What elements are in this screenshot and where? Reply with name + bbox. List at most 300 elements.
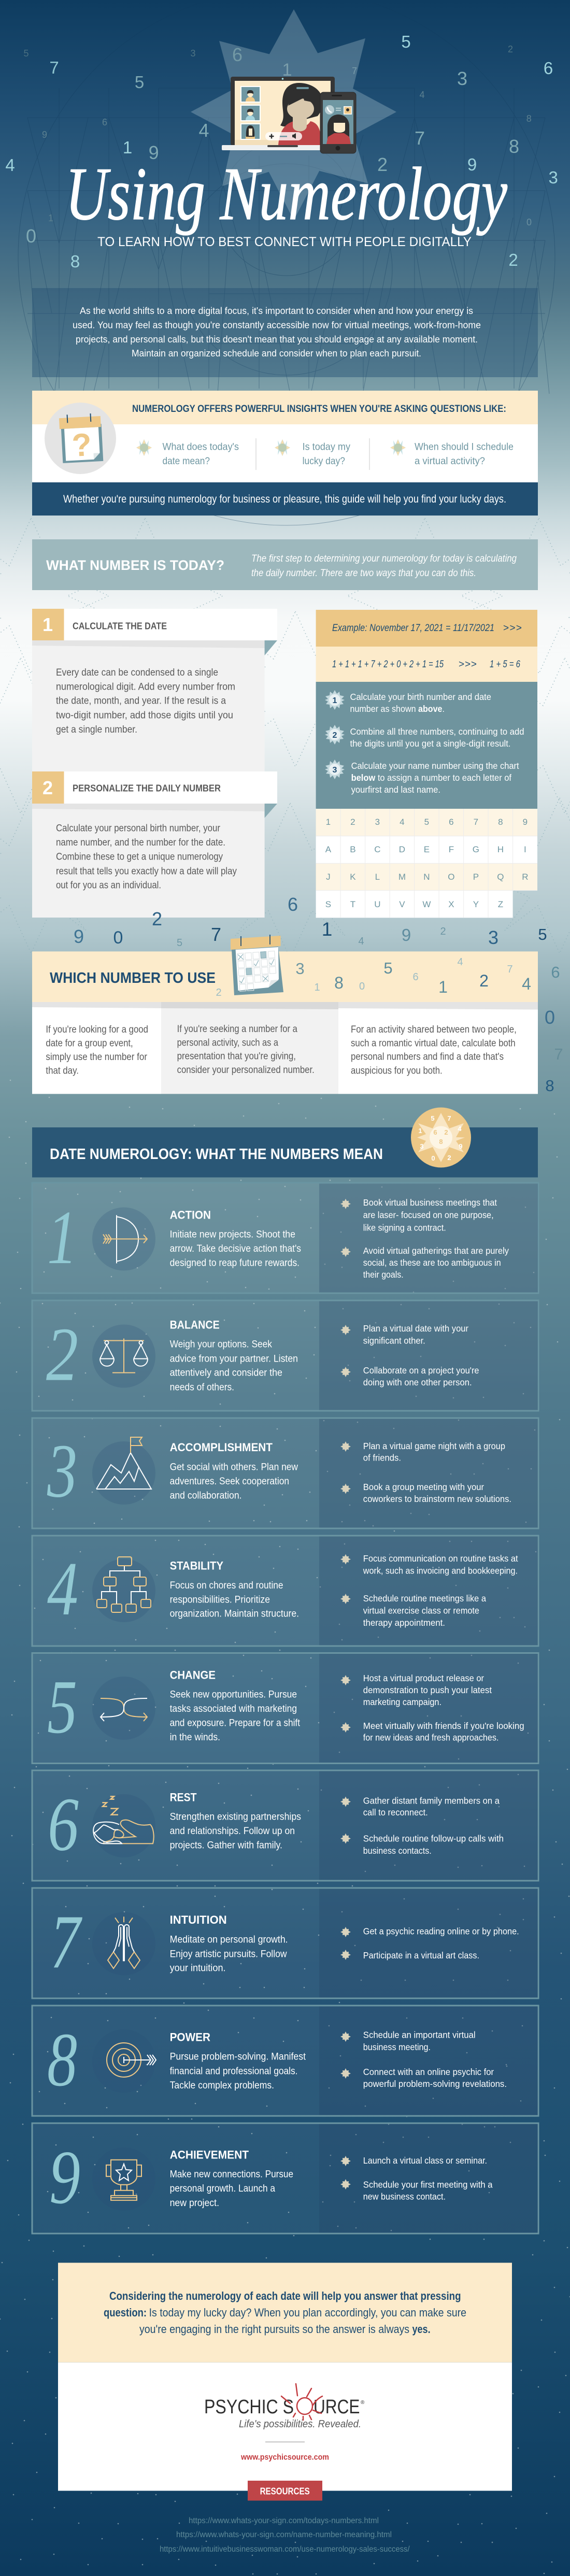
icon: number medallion: 7 (447, 1114, 451, 1122)
letter number chart: 2 (350, 817, 355, 827)
instruction 1 (325, 690, 491, 714)
question 3: When should I schedule (415, 441, 514, 453)
example date: Example: November 17, 2021 = 11/17/2021 (332, 623, 494, 634)
hero floating numbers: 9 (42, 130, 47, 140)
floating numbers around which-number panel: 5 (177, 937, 182, 949)
tips: Book a group meeting with your (363, 1482, 484, 1492)
resources button: RESOURCES (260, 2486, 310, 2496)
description: Meditate on personal growth. (170, 1935, 288, 1945)
floating numbers around which-number panel: 4 (358, 936, 364, 947)
instruction 2 (325, 725, 524, 749)
numeral: 3 (47, 1429, 77, 1514)
letter number chart: Z (498, 899, 503, 909)
heading: DATE NUMEROLOGY: WHAT THE NUMBERS MEAN (50, 1146, 383, 1163)
description: needs of others. (170, 1382, 234, 1393)
tips: Schedule routine meetings like a (363, 1593, 486, 1604)
description (170, 1462, 298, 1501)
step title: CALCULATE THE DATE (73, 621, 167, 631)
section intro (251, 553, 517, 579)
letter number chart: V (399, 899, 405, 909)
description: financial and professional goals. (170, 2066, 297, 2077)
hero floating numbers: 9 (149, 142, 159, 163)
letter number chart: Q (497, 872, 504, 882)
thumbnail participants (240, 86, 261, 140)
tips: Schedule routine follow-up calls with (363, 1834, 504, 1844)
icon: mountain flag (92, 1437, 155, 1505)
description (170, 1229, 301, 1268)
geometric line pattern (18, 0, 555, 525)
hero floating numbers: 8 (509, 136, 519, 157)
column 2: presentation that you're giving, (177, 1051, 296, 1062)
description: tasks associated with marketing (170, 1704, 297, 1714)
floating numbers around which-number panel: 6 (288, 894, 298, 915)
instruction 3: 3 (333, 766, 337, 775)
conclusion text: Considering the numerology of each date will help you answer that pressing (109, 2289, 461, 2302)
description: Focus on chores and routine (170, 1580, 283, 1591)
icon: number medallion (411, 1108, 471, 1168)
floating numbers around which-number panel: 0 (545, 1007, 555, 1028)
column 3 (338, 1002, 538, 1094)
letter number chart: I (524, 845, 526, 854)
numeral: 8 (47, 2017, 77, 2102)
example sum: 1 + 5 = 6 (490, 659, 520, 670)
description: Pursue problem-solving. Manifest (170, 2052, 306, 2062)
description (170, 2169, 293, 2209)
tips: call to reconnect. (363, 1807, 428, 1817)
description: organization. Maintain structure. (170, 1608, 299, 1620)
icon: shuffle arrows (92, 1677, 155, 1740)
hero floating numbers: 4 (419, 90, 425, 100)
letter number chart: 4 (400, 817, 405, 827)
description (170, 1580, 299, 1620)
floating numbers around which-number panel: 8 (545, 1077, 554, 1095)
hero floating numbers: 7 (49, 58, 59, 77)
floating numbers around which-number panel: 3 (295, 960, 305, 978)
tips: business contacts. (363, 1845, 432, 1856)
title: STABILITY (170, 1559, 223, 1572)
tips: are laser- focused on one purpose, (363, 1210, 494, 1220)
conclusion text: you're engaging in the right pursuits so the answer is always (139, 2323, 409, 2336)
row 2: balance (32, 1300, 538, 1411)
description (170, 1811, 301, 1851)
tips: of friends. (363, 1453, 401, 1463)
column 2: consider your personalized number. (177, 1065, 315, 1076)
tips: significant other. (363, 1336, 425, 1346)
floating numbers around which-number panel: 2 (479, 971, 489, 990)
resource links: https://www.whats-your-sign.com/todays-numbers.html (189, 2516, 379, 2525)
description: Tackle complex problems. (170, 2080, 274, 2091)
tagline: Life's possibilities. Revealed. (239, 2418, 361, 2430)
tips: coworkers to brainstorm new solutions. (363, 1494, 511, 1504)
hero floating numbers: 2 (377, 154, 388, 175)
column 3: For an activity shared between two people, (351, 1024, 517, 1035)
icon: calendar question mark: ? (71, 427, 92, 464)
numeral: 7 (50, 1899, 83, 1984)
hero floating numbers: 5 (135, 73, 144, 92)
floating numbers around which-number panel: 6 (551, 963, 560, 981)
column 1: date for a group event, (46, 1038, 133, 1049)
tips: new business contact. (363, 2192, 446, 2202)
column 1: simply use the number for (46, 1052, 148, 1063)
letter number chart: M (398, 872, 406, 882)
letter number chart: D (399, 845, 405, 854)
hero floating numbers: 6 (102, 117, 107, 127)
description: designed to reap future rewards. (170, 1258, 300, 1268)
woman on screen (278, 83, 323, 145)
description (170, 1339, 298, 1393)
hero floating numbers: 5 (401, 32, 411, 51)
step text (56, 667, 235, 735)
hero floating numbers: 3 (457, 68, 467, 89)
hero floating numbers: 0 (526, 217, 532, 227)
description: and collaboration. (170, 1490, 241, 1501)
letter number chart (316, 809, 537, 918)
letter number chart: L (375, 872, 380, 882)
title: POWER (170, 2031, 210, 2043)
icon: number medallion: 4 (458, 1125, 462, 1133)
tips: Host a virtual product release or (363, 1673, 484, 1683)
conclusion text: question: (104, 2306, 147, 2319)
intro text: projects, and personal calls, but this doesn't mean that you should engage at any available moment. (76, 334, 478, 345)
column 1: that day. (46, 1065, 79, 1077)
letter number chart: Y (473, 899, 479, 909)
tips: their goals. (363, 1269, 404, 1280)
numeral: 2 (46, 1312, 78, 1397)
numeral: 9 (49, 2135, 80, 2220)
icon: number medallion: 8 (439, 1138, 443, 1146)
letter number chart: E (424, 845, 430, 854)
instruction 3: below to assign a number to each letter of (351, 772, 511, 783)
description: Make new connections. Pursue (170, 2169, 293, 2180)
logo: psychic source: URCE (314, 2396, 360, 2418)
numbers over star: 4 (198, 120, 209, 141)
letter number chart: N (423, 872, 430, 882)
tips: social, as these are too ambiguous in (363, 1257, 501, 1268)
hero floating numbers: 8 (526, 113, 532, 124)
column 3: such a romantic virtual date, calculate both (351, 1038, 516, 1049)
icon: bow and arrow (92, 1207, 155, 1270)
icon: number medallion: 1 (418, 1127, 422, 1135)
description: new project. (170, 2198, 219, 2209)
column 3: auspicious for you both. (351, 1065, 443, 1076)
tips (340, 1673, 524, 1743)
letter number chart: 3 (375, 817, 380, 827)
floating numbers around which-number panel: 7 (211, 924, 221, 945)
tips (340, 1553, 518, 1628)
floating numbers around which-number panel: 2 (440, 926, 446, 937)
instruction 2: the digits until you get a single-digit result. (350, 738, 511, 749)
letter number chart: P (473, 872, 479, 882)
step text: get a single number. (56, 724, 137, 735)
letter number chart: H (497, 845, 504, 854)
instruction 2: 2 (333, 731, 337, 740)
tips: Schedule an important virtual (363, 2030, 476, 2040)
description: arrow. Take decisive action that's (170, 1243, 301, 1254)
description (170, 2052, 306, 2091)
intro text (73, 305, 481, 359)
question 1: What does today's (163, 441, 239, 453)
numbers over star: 7 (352, 66, 357, 76)
hero floating numbers: 3 (549, 168, 558, 187)
resource links (160, 2516, 410, 2554)
tips: Book virtual business meetings that (363, 1197, 497, 1208)
floating numbers around which-number panel: 5 (383, 959, 393, 977)
step number: 2 (42, 777, 53, 798)
intro text: Maintain an organized schedule and consider when to plan each pursuit. (132, 348, 421, 359)
section intro: The first step to determining your numerology for today is calculating (251, 553, 517, 564)
numeral: 1 (47, 1195, 77, 1280)
numeral: 6 (48, 1782, 79, 1867)
letter number chart: W (422, 899, 431, 909)
numbers over star: 6 (232, 44, 243, 65)
hero floating numbers: 2 (508, 44, 513, 54)
resource links: https://www.whats-your-sign.com/name-number-meaning.html (176, 2530, 392, 2539)
description: Get social with others. Plan new (170, 1462, 298, 1472)
intro text: used. You may feel as though you're constantly accessible now for virtual meetings, work-from-home (73, 319, 481, 331)
hero floating numbers: 1 (123, 138, 132, 157)
description: advice from your partner. Listen (170, 1353, 298, 1365)
tips: Get a psychic reading online or by phone. (363, 1926, 519, 1937)
letter number chart: O (448, 872, 455, 882)
tips (340, 2030, 507, 2089)
letter number chart: B (350, 845, 356, 854)
description: Initiate new projects. Shoot the (170, 1229, 295, 1240)
icon: number medallion: 2 (444, 1128, 448, 1136)
logo: psychic source (204, 2384, 365, 2430)
letter number chart: 8 (498, 817, 503, 827)
icon: phone video call (320, 92, 356, 153)
question 1: date mean? (163, 455, 210, 467)
icon: trophy (92, 2148, 155, 2211)
icon: checklist calendar (231, 935, 283, 995)
icon: number medallion: 0 (431, 1154, 435, 1162)
letter number chart: G (473, 845, 479, 854)
tips (340, 1323, 479, 1387)
tips: business meeting. (363, 2042, 431, 2052)
tips: Gather distant family members on a (363, 1795, 500, 1806)
tips: powerful problem-solving revelations. (363, 2079, 507, 2089)
panel: which number to use (32, 951, 538, 1094)
resource links: https://www.intuitivebusinesswoman.com/use-numerology-sales-success/ (160, 2545, 410, 2554)
step text: Calculate your personal birth number, your (56, 823, 221, 834)
volume control (265, 132, 302, 140)
floating numbers around which-number panel: 6 (412, 971, 419, 983)
column 3: personal numbers and find a date that's (351, 1052, 504, 1062)
letter number chart: U (374, 899, 381, 909)
column 2: If you're seeking a number for a (177, 1024, 297, 1035)
title: INTUITION (170, 1913, 227, 1926)
hero floating numbers: 3 (190, 48, 196, 59)
floating numbers around which-number panel: 4 (522, 975, 531, 993)
tips: Plan a virtual game night with a group (363, 1441, 505, 1451)
tips: marketing campaign. (363, 1697, 441, 1707)
lucky days statement: Whether you're pursuing numerology for business or pleasure, this guide will help you find your lucky days. (63, 493, 506, 505)
resources button (248, 2481, 322, 2500)
tips: Schedule your first meeting with a (363, 2179, 493, 2189)
letter number chart: T (350, 899, 355, 909)
floating numbers around which-number panel: 1 (438, 978, 448, 996)
dotted star outlines (0, 518, 570, 958)
floating numbers around which-number panel: 2 (216, 987, 222, 998)
section intro: the daily number. There are two ways that you can do this. (251, 568, 476, 579)
icon: number medallion: 6 (433, 1128, 437, 1136)
floating numbers around which-number panel: 3 (488, 927, 498, 948)
icon: number medallion: 3 (420, 1142, 424, 1150)
icon: praying hands (92, 1912, 155, 1975)
hero floating numbers (5, 32, 558, 271)
heading: WHICH NUMBER TO USE (50, 970, 216, 986)
tips: demonstration to push your latest (363, 1685, 492, 1695)
title: ACHIEVEMENT (170, 2148, 249, 2162)
icon: sleeping person (92, 1794, 155, 1857)
row 8: power (32, 2006, 538, 2116)
description: Weigh your options. Seek (170, 1339, 272, 1350)
step text: numerological digit. Add every number from (56, 682, 235, 692)
step text (56, 823, 237, 891)
step text: two-digit number, add those digits until you (56, 710, 233, 721)
letter number chart: K (350, 872, 356, 882)
logo: psychic source: ® (361, 2400, 365, 2406)
description: Strengthen existing partnerships (170, 1811, 301, 1823)
section heading: WHAT NUMBER IS TODAY? (46, 557, 224, 573)
hero floating numbers: 4 (5, 155, 15, 175)
floating numbers around which-number panel: 9 (74, 926, 84, 947)
icon: calendar question mark (45, 403, 116, 474)
panel: date numerology header (32, 1108, 538, 1177)
column 1: If you're looking for a good (46, 1024, 148, 1035)
description (170, 1689, 301, 1743)
hero floating numbers: 7 (415, 127, 425, 149)
row 9: achievement (32, 2123, 538, 2234)
letter number chart: F (449, 845, 454, 854)
step text: Combine these to get a unique numerology (56, 852, 223, 862)
letter number chart: J (326, 872, 331, 882)
hero floating numbers: 9 (467, 155, 477, 174)
description: Enjoy artistic pursuits. Follow (170, 1949, 287, 1959)
title: ACCOMPLISHMENT (170, 1441, 273, 1454)
hero floating numbers: 8 (70, 252, 80, 271)
example sum: >>> (459, 659, 477, 670)
description: projects. Gather with family. (170, 1840, 282, 1851)
letter number chart: A (325, 845, 332, 854)
description: and relationships. Follow up on (170, 1826, 295, 1837)
row 3: accomplishment (32, 1418, 538, 1528)
description: personal growth. Launch a (170, 2183, 275, 2194)
description: in the winds. (170, 1732, 220, 1743)
step text: Every date can be condensed to a single (56, 667, 218, 678)
hero floating numbers: 0 (26, 225, 36, 247)
letter number chart: 5 (424, 817, 429, 827)
tips: for new ideas and fresh approaches. (363, 1733, 498, 1743)
tips (340, 2155, 493, 2202)
row 4: stability (32, 1536, 538, 1646)
instruction 1: 1 (333, 696, 337, 705)
description: your intuition. (170, 1963, 226, 1974)
instruction 1: number as shown above. (350, 704, 445, 714)
step number: 1 (42, 614, 53, 635)
icon: number medallion: 5 (431, 1114, 435, 1122)
instruction 3: yourfirst and last name. (351, 784, 440, 795)
tips (340, 1197, 509, 1280)
tips: therapy appointment. (363, 1618, 445, 1628)
letter number chart: 6 (449, 817, 454, 827)
question 2: lucky day? (303, 455, 345, 467)
title: REST (170, 1791, 197, 1804)
tips: Participate in a virtual art class. (363, 1950, 479, 1960)
hero floating numbers: 2 (508, 250, 518, 269)
tips: like signing a contract. (363, 1223, 446, 1233)
numbers over star: 1 (282, 60, 292, 80)
panel: worked example (316, 610, 537, 918)
description: Seek new opportunities. Pursue (170, 1689, 297, 1700)
tips (340, 1441, 511, 1504)
floating numbers around which-number panel: 9 (402, 925, 411, 944)
panel: introduction (32, 288, 538, 377)
instruction 2: Combine all three numbers, continuing to add (350, 726, 524, 737)
step text: result that tells you exactly how a date will play (56, 866, 237, 877)
numeral: 5 (47, 1665, 77, 1750)
column 2: personal activity, such as a (177, 1037, 278, 1049)
floating numbers around which-number panel: 7 (507, 964, 513, 975)
hero floating numbers: 1 (48, 213, 53, 223)
subtitle: TO LEARN HOW TO BEST CONNECT WITH PEOPLE DIGITALLY (97, 235, 472, 249)
floating numbers around which-number panel: 4 (457, 956, 463, 968)
letter number chart: R (522, 872, 529, 882)
question 3: a virtual activity? (415, 455, 485, 467)
description (170, 1935, 288, 1974)
starfield dots (0, 1080, 570, 2574)
floating numbers around which-number panel: 1 (314, 982, 320, 993)
tips: doing with one other person. (363, 1377, 472, 1387)
floating numbers around which-number panel: 7 (554, 1045, 563, 1063)
floating numbers around which-number panel: 0 (113, 928, 123, 948)
icon: org chart (92, 1557, 155, 1622)
hero star burst (191, 9, 396, 220)
row 6: rest (32, 1770, 538, 1881)
column 1 (32, 1002, 161, 1094)
letter number chart: X (448, 899, 454, 909)
row 5: change (32, 1653, 538, 1764)
letter number chart: 9 (523, 817, 528, 827)
logo: psychic source: PSYCHIC S (204, 2396, 294, 2418)
tips: Launch a virtual class or seminar. (363, 2155, 487, 2166)
tips: Meet virtually with friends if you're looking (363, 1721, 524, 1731)
example sum: 1 + 1 + 1 + 7 + 2 + 0 + 2 + 1 = 15 (332, 659, 444, 670)
question 1 (136, 439, 239, 467)
tips: virtual exercise class or remote (363, 1606, 479, 1616)
letter number chart: S (325, 899, 331, 909)
title: CHANGE (170, 1668, 216, 1682)
letter number chart: 1 (326, 817, 331, 827)
panel: conclusion (58, 2263, 512, 2491)
step 1: calculate the date (32, 609, 277, 771)
icon: sun (281, 2384, 322, 2420)
floating numbers around which-number panel: 5 (538, 925, 547, 943)
column 2 (161, 1002, 338, 1094)
tips: work, such as invoicing and bookkeeping. (363, 1566, 518, 1576)
icon: laptop video call (222, 77, 335, 150)
hero floating numbers: 5 (23, 48, 29, 59)
instruction 3: Calculate your name number using the chart (351, 761, 519, 771)
hero floating numbers: 6 (544, 59, 553, 78)
description: and exposure. Prepare for a shift (170, 1718, 301, 1728)
floating numbers around which-number panel: 1 (322, 919, 332, 940)
tips: Connect with an online psychic for (363, 2067, 494, 2077)
instruction 1: Calculate your birth number and date (350, 692, 491, 702)
tips: Avoid virtual gatherings that are purely (363, 1246, 509, 1256)
title: ACTION (170, 1208, 211, 1222)
numbers over star (198, 44, 357, 141)
